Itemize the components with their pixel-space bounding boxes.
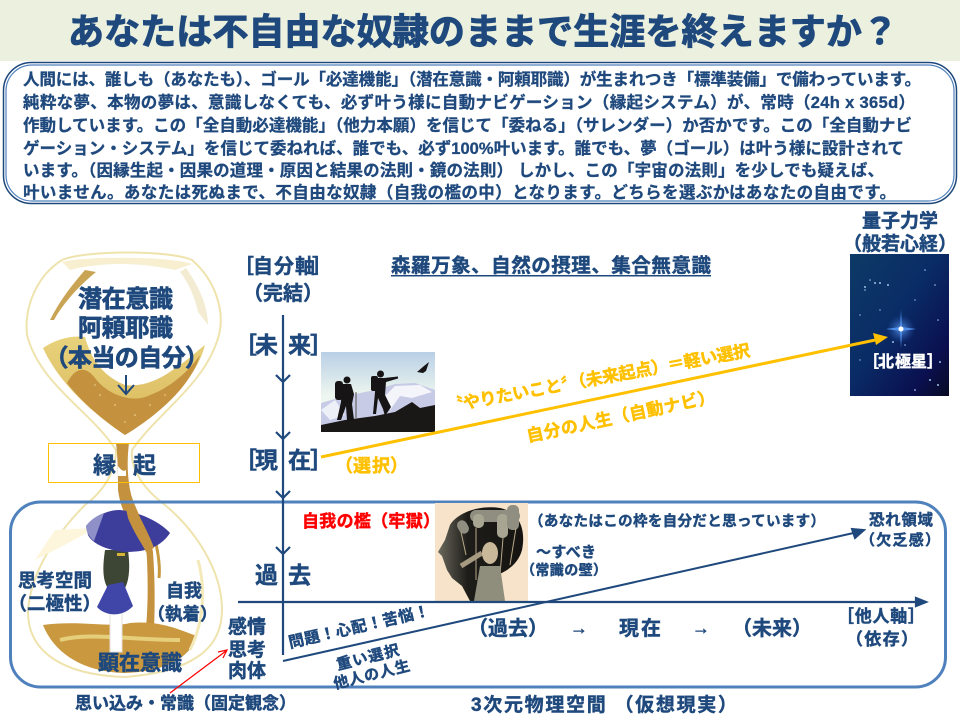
timeline labels: （未来）: [732, 617, 812, 640]
timeline labels: [468, 617, 812, 640]
text block: subconscious: 潜在意識: [78, 286, 173, 313]
label: fear zone: 恐れ領域: [869, 511, 933, 529]
timeline labels: →: [570, 618, 588, 638]
label: other axis: [837, 607, 925, 649]
text block: subconscious: （本当の自分）: [44, 345, 209, 372]
label: heavy choice: 重い選択: [335, 641, 401, 674]
label: conscious mind: 顕在意識: [98, 652, 182, 675]
label: emotion thought body: 思考: [228, 639, 266, 661]
label: present: ［現在］: [234, 447, 333, 473]
panel: intro text: 作動しています。この「全自動必達機能」（他力本願）を信じて「委ねる」（サレンダー）か否かです。この「全自動ナビ: [23, 115, 912, 135]
timeline labels: 現在: [619, 617, 661, 640]
text block: ego: [148, 581, 218, 624]
heading: nature: 森羅万象、自然の摂理、集合無意識: [391, 254, 711, 277]
timeline labels: →: [692, 618, 710, 638]
text block: subconscious: 阿頼耶識: [78, 315, 173, 342]
text: common sense wall: ～すべき: [536, 544, 596, 561]
label: past: 過去: [255, 562, 311, 588]
label: what you want to do: 〝やりたいこと〞（未来起点）＝軽い選択: [445, 341, 752, 416]
label: en-gi: 縁起: [93, 452, 156, 478]
label: other axis: （依存）: [846, 629, 918, 649]
label: north star: ［北極星］: [863, 352, 943, 371]
text block: subconscious: [44, 286, 209, 394]
label: emotion thought body: [228, 615, 266, 682]
callout: en-gi box: [48, 444, 200, 482]
text block: thinking space: 思考空間: [18, 570, 92, 591]
label: self axis: （完結）: [243, 282, 323, 305]
label: quantum mechanics: 量子力学: [862, 209, 938, 232]
text: common sense wall: [521, 544, 607, 578]
label: 3D physical space: 3次元物理空間 （仮想現実）: [471, 694, 737, 716]
panel: intro text: ゲーション・システム」を信じて委ねれば、誰でも、必ず100%叶います。誰でも、夢（ゴール）は叶う様に設計されて: [23, 138, 904, 158]
label: others' life: 他人の人生: [332, 658, 412, 693]
label: your own life: 自分の人生（自動ナビ）: [525, 386, 717, 446]
panel: intro text: 人間には、誰しも（あなたも）、ゴール「必達機能」（潜在意識・阿頼耶識）が生まれつき「標準装備」で備わっています。: [23, 69, 921, 89]
label: fixed ideas: 思い込み・常識（固定観念）: [75, 693, 296, 713]
chart: horizontal axis: [238, 598, 926, 606]
text block: ego: 自我: [166, 581, 202, 601]
label: fear zone: [860, 511, 940, 549]
label: self axis: [234, 255, 332, 305]
image: climbers on mountain: [321, 352, 435, 432]
panel: intro text: います。（因縁生起・因果の道理・原因と結果の法則・鏡の法則） しかし、この「宇宙の法則」を少しでも疑えば、: [23, 160, 884, 180]
panel: intro text: 純粋な夢、本物の夢は、意識しなくても、必ず叶う様に自動ナビゲーション（縁起システム）が、常時（24h x 365d）: [23, 92, 915, 112]
panel: physical space frame: [10, 502, 946, 687]
label: emotion thought body: 感情: [228, 615, 266, 638]
label: fear zone: （欠乏感）: [860, 531, 940, 549]
image: head with puppet: [435, 503, 528, 601]
chart: vertical axis: [276, 315, 290, 655]
text block: ego: （執着）: [148, 604, 218, 624]
label: quantum mechanics: （般若心経）: [843, 233, 957, 255]
text block: thinking space: （二極性）: [8, 593, 101, 614]
text: you think this frame is yourself: （あなたはこの枠を自分だと思っています）: [529, 512, 825, 530]
arrow: down from subconscious: [118, 375, 134, 394]
arrow: yellow choice line: [321, 333, 888, 457]
label: other axis: ［他人軸］: [837, 607, 925, 626]
text block: thinking space: [8, 570, 101, 614]
label: self axis: ［自分軸］: [234, 255, 332, 278]
illustration: girl with umbrella: [86, 490, 170, 652]
label: ego prison: 自我の檻（牢獄）: [302, 511, 440, 531]
illustration: hourglass: [27, 252, 222, 677]
title band: [0, 0, 960, 61]
text: common sense wall: （常識の壁）: [521, 562, 607, 578]
arrow: red pointer: [170, 650, 227, 693]
timeline labels: （過去）: [468, 617, 548, 640]
arrow: heavy choice line: [283, 529, 864, 661]
label: future: ［未来］: [234, 332, 333, 358]
panel: intro text: 叶いません。あなたは死ぬまで、不自由な奴隷（自我の檻の中）となります。どちらを選ぶかはあなたの自由です。: [23, 182, 896, 202]
label: emotion thought body: 肉体: [228, 660, 266, 682]
title: あなたは不自由な奴隷のままで生涯を終えますか？: [68, 11, 898, 52]
panel: intro text: [4, 62, 956, 204]
label: choice: （選択）: [335, 456, 408, 476]
image: north star sky: [850, 254, 949, 396]
label: problems: 問題！心配！苦悩！: [287, 601, 431, 652]
label: quantum mechanics: [843, 209, 957, 255]
